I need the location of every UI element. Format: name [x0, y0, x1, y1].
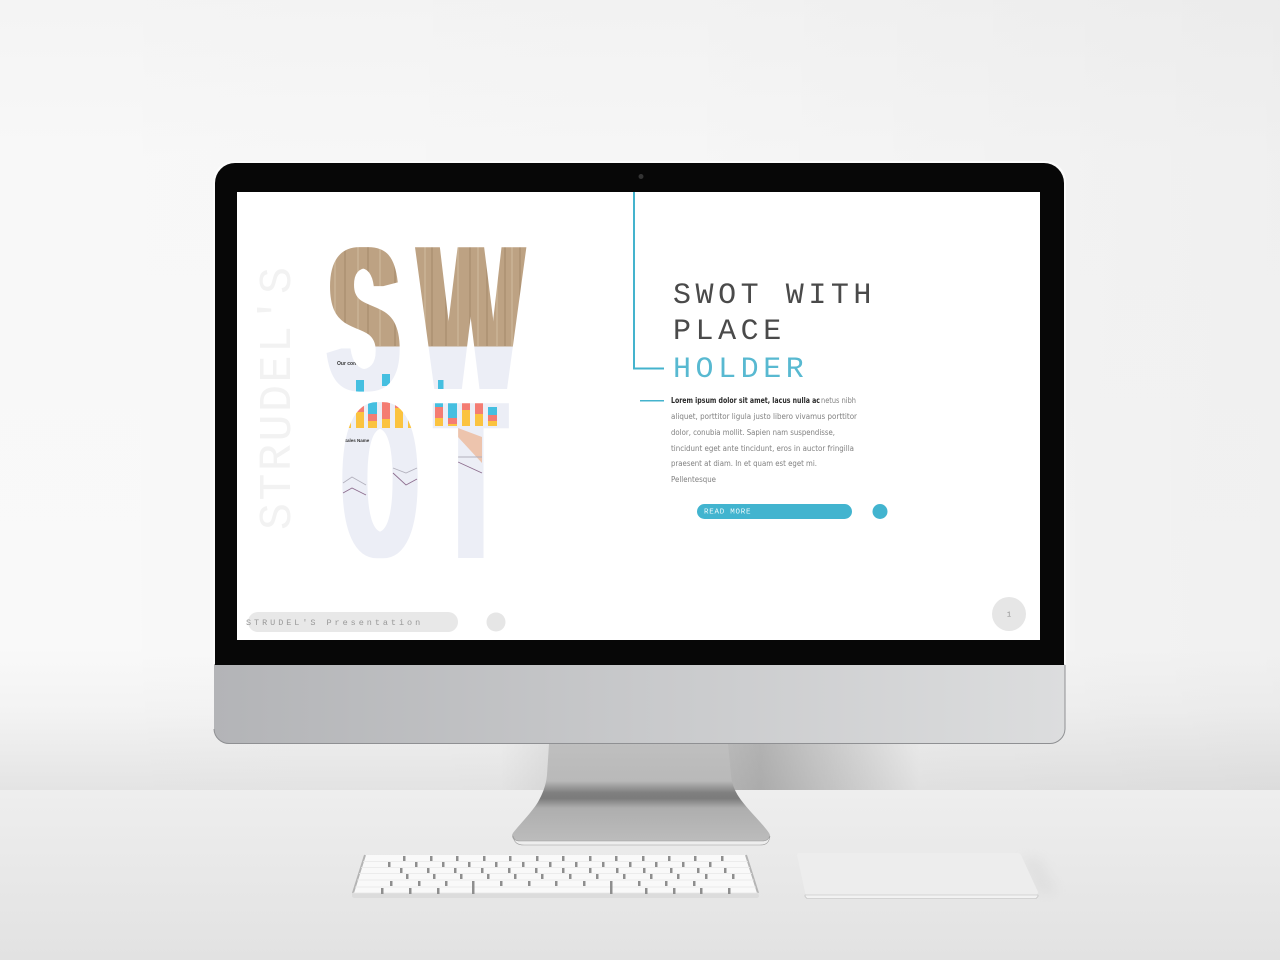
heading line 2: PLACE — [673, 315, 786, 349]
key gaps — [381, 856, 734, 894]
chin bottom edge — [214, 665, 1065, 744]
trackpad lip — [805, 895, 1038, 898]
desk surface — [0, 790, 1280, 960]
monitor chin — [214, 664, 1065, 744]
read more button — [697, 504, 852, 519]
body line 1 end: netus nibh — [821, 396, 856, 405]
page number badge — [992, 597, 1026, 631]
row 3 gaps — [400, 868, 726, 873]
monitor — [213, 161, 1066, 744]
row 4 gaps — [406, 874, 734, 879]
heading line 1: SWOT WITH — [673, 279, 876, 313]
page number: 1 — [1007, 612, 1011, 620]
short blue dash — [640, 400, 664, 402]
row 2 gaps — [388, 862, 712, 867]
keyboard — [352, 855, 759, 898]
body line 3: dolor, conubia mollit. Sapien nam suspendisse, — [671, 428, 835, 437]
chart lines — [343, 457, 482, 495]
button pill — [697, 504, 852, 519]
keyboard lip — [352, 892, 759, 898]
trackpad — [797, 853, 1058, 898]
badge circle — [992, 597, 1026, 631]
stacked bars on O — [348, 402, 412, 428]
body line 2: aliquet, porttitor ligula justo libero vivamus porttitor — [671, 412, 858, 421]
body paragraph — [671, 396, 858, 484]
body line 5: praesent at diam. In et quam est eget mi. — [671, 459, 817, 468]
SWOT picture-filled letters — [326, 247, 526, 558]
keyboard keys plate — [353, 855, 758, 893]
chart photo — [326, 346, 513, 558]
footer pill — [248, 612, 458, 632]
button dot — [872, 504, 888, 519]
stand base edge — [513, 836, 770, 845]
body line 6: Pellentesque — [671, 475, 716, 484]
trackpad cast shadow — [1020, 858, 1058, 894]
black bezel — [215, 163, 1064, 665]
footer text: STRUDEL'S Presentation — [246, 618, 423, 628]
body line 4: tincidunt eget ante tincidunt, eros in auctor fringilla — [671, 444, 854, 453]
row 5 gaps — [390, 881, 696, 886]
wood texture — [330, 247, 526, 346]
stacked bars on T — [435, 403, 497, 426]
footer label — [246, 612, 458, 632]
blue connector line — [634, 192, 664, 368]
row 6 gaps — [381, 881, 730, 894]
row 1 gaps — [403, 856, 724, 861]
webcam — [638, 174, 644, 179]
screen — [237, 192, 1040, 640]
monitor halo — [213, 161, 1066, 665]
heading — [673, 279, 876, 387]
trackpad surface — [797, 853, 1038, 895]
key row separators — [353, 862, 758, 893]
blue bars on S and W — [356, 374, 444, 392]
tiny chart caption: Sales Name — [344, 438, 370, 443]
vertical watermark text: STRUDEL'S — [253, 264, 304, 530]
heading line 3: HOLDER — [673, 353, 808, 387]
hand in photo — [458, 428, 482, 463]
stand neck and base — [512, 744, 770, 841]
tiny chart caption: Our comp. — [337, 361, 363, 367]
bold lead-in: Lorem ipsum dolor sit amet, lacus nulla ac — [671, 396, 820, 405]
monitor shadow on wall — [500, 744, 920, 790]
keyboard sides — [353, 855, 758, 893]
footer dot — [486, 612, 506, 632]
monitor stand — [512, 744, 770, 845]
button label: READ MORE — [704, 508, 751, 516]
